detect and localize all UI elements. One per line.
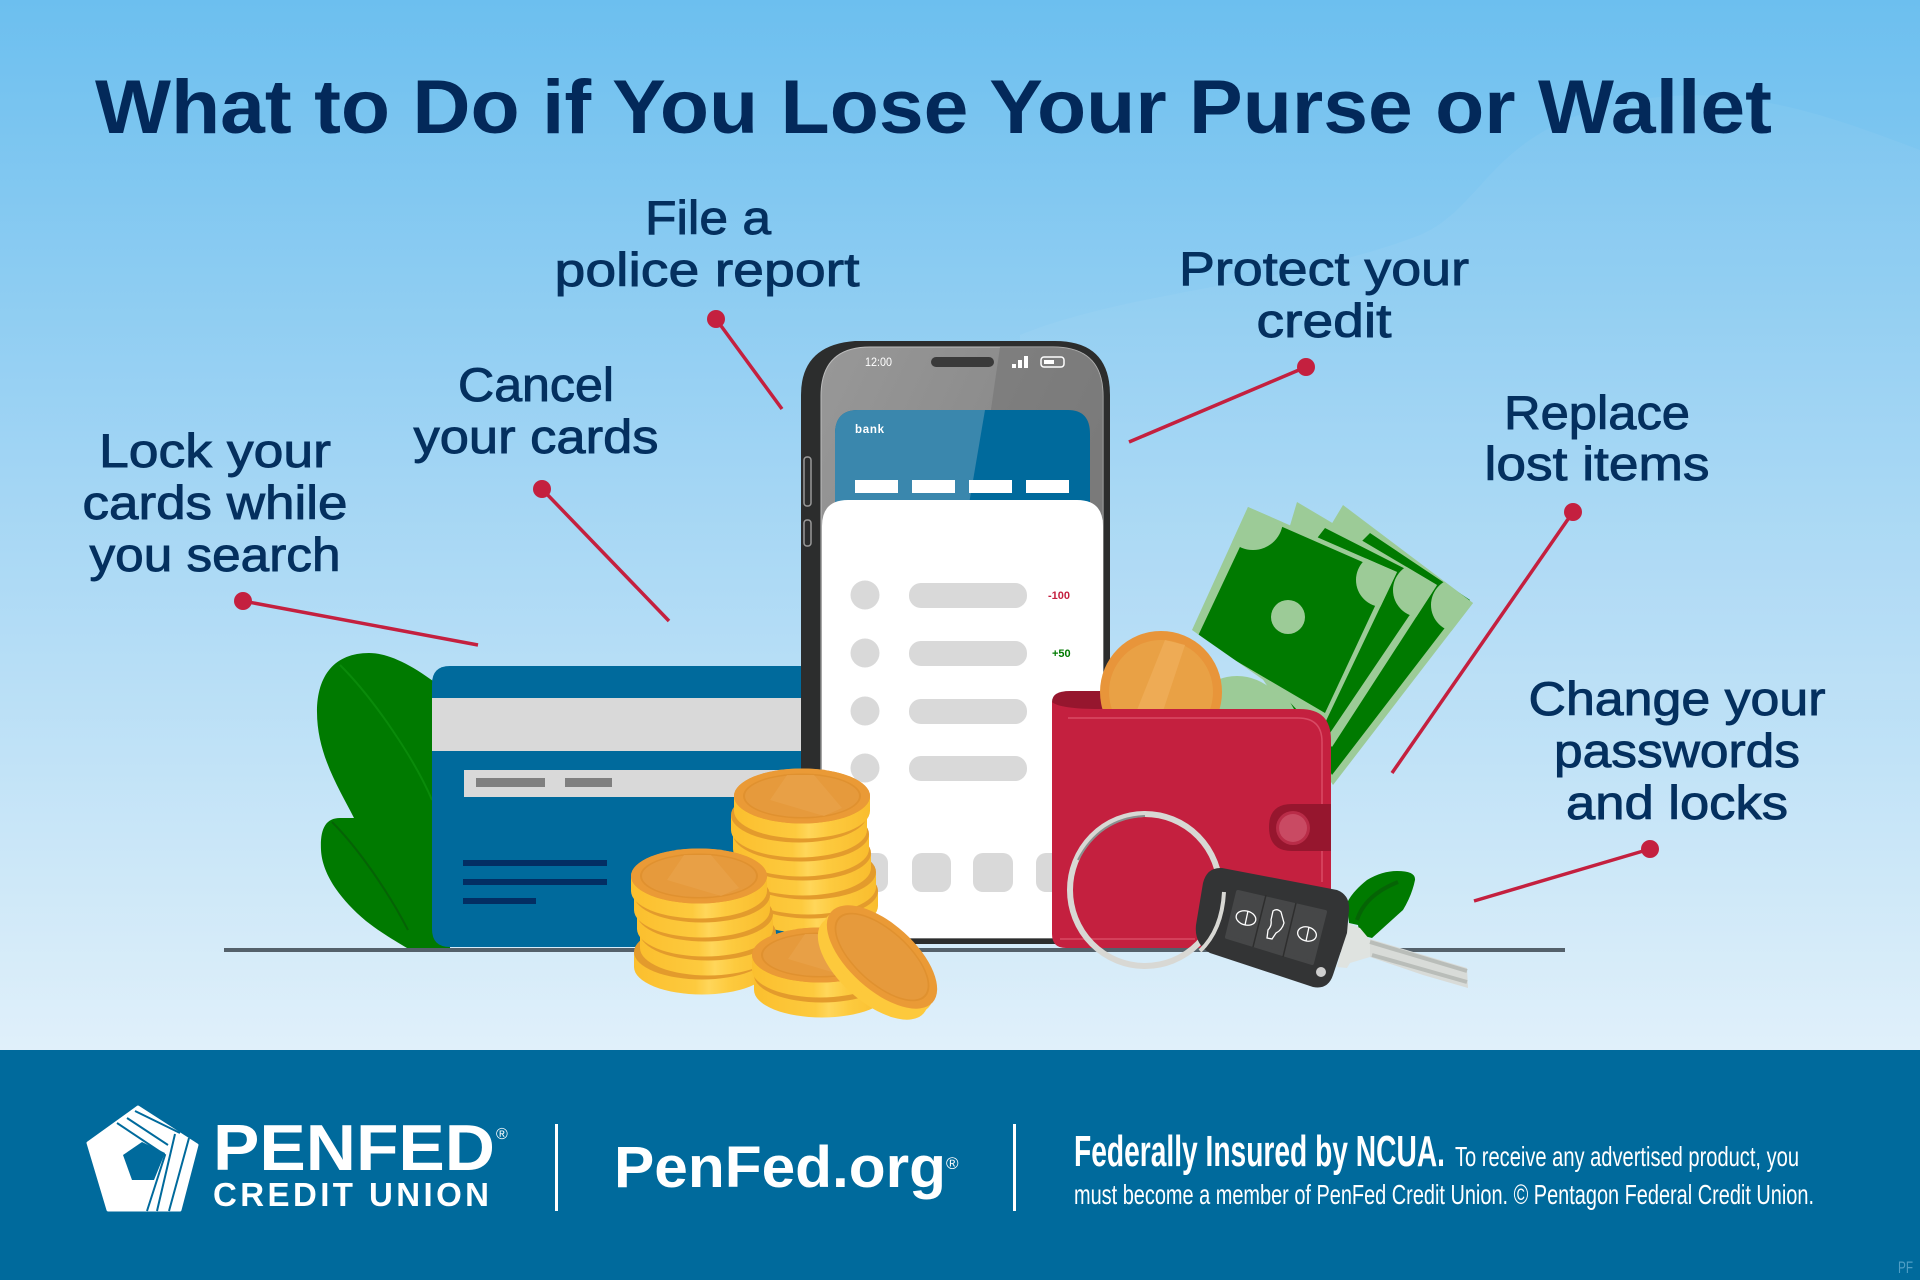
footer band	[0, 1050, 1920, 1280]
label: cancel your cards: your cards	[414, 410, 658, 463]
label: change passwords: passwords	[1554, 724, 1800, 777]
small leaf right	[1347, 871, 1415, 938]
website: ®	[946, 1154, 959, 1173]
logo wordmark: PENFED	[213, 1111, 495, 1184]
label: replace lost items	[1484, 386, 1710, 490]
key ring	[1070, 814, 1220, 966]
label: file a police report: File a	[645, 191, 772, 244]
pointer: protect credit	[1129, 358, 1315, 442]
cash bills	[1192, 502, 1473, 785]
label: file a police report	[554, 191, 860, 296]
label: lock your cards	[82, 424, 348, 581]
logo mark	[88, 1107, 197, 1211]
side buttons	[804, 457, 811, 546]
label: lock your cards: you search	[90, 528, 340, 581]
disclosure: Federally Insured by NCUA.	[1074, 1127, 1445, 1176]
coin in wallet	[1100, 631, 1222, 709]
transaction panel	[822, 500, 1103, 938]
label: protect your credit: credit	[1256, 294, 1392, 347]
front coins	[752, 887, 955, 1038]
label: protect your credit: Protect your	[1179, 242, 1469, 295]
left coin stack	[631, 848, 776, 994]
key blade	[1337, 923, 1468, 988]
disclosure	[1074, 1127, 1814, 1210]
label: protect your credit	[1179, 242, 1469, 347]
pointer: lock cards	[234, 592, 478, 645]
logo wordmark	[213, 1111, 508, 1213]
label: change passwords: Change your	[1528, 672, 1826, 725]
leaves left	[317, 653, 450, 948]
label: lock your cards: cards while	[82, 476, 348, 529]
pointer: replace items	[1392, 503, 1582, 773]
front bill	[1192, 507, 1397, 720]
status bar: 12:00	[865, 355, 892, 369]
bank card: bank	[855, 424, 885, 436]
pointer: cancel cards	[533, 480, 669, 621]
floor line	[224, 948, 1565, 952]
label: replace lost items: Replace	[1504, 386, 1690, 439]
label: cancel your cards: Cancel	[458, 358, 614, 411]
website: PenFed.org	[614, 1135, 946, 1200]
pointer: police report	[707, 310, 782, 409]
wallet clasp	[1269, 804, 1331, 851]
logo wordmark: ®	[496, 1126, 508, 1143]
title: What to Do if You Lose Your Purse or Wallet	[95, 65, 1772, 150]
status bar	[865, 355, 1064, 369]
back bill	[1263, 505, 1473, 785]
car key	[1070, 814, 1468, 988]
wallet	[1052, 631, 1331, 948]
transaction panel: +50	[1052, 648, 1071, 660]
label: cancel your cards	[414, 358, 658, 463]
credit card	[432, 666, 810, 947]
middle bill	[1286, 502, 1437, 747]
bank card	[835, 410, 1090, 510]
label: change passwords	[1528, 672, 1826, 829]
label: file a police report: police report	[554, 243, 860, 296]
pointer: change passwords	[1474, 840, 1659, 901]
label: lock your cards: Lock your	[99, 424, 331, 477]
logo wordmark: CREDIT UNION	[213, 1176, 489, 1213]
label: change passwords: and locks	[1566, 776, 1788, 829]
smartphone	[801, 341, 1110, 944]
label: replace lost items: lost items	[1484, 437, 1710, 490]
job code: PF	[1898, 1258, 1913, 1277]
transaction panel: -100	[1048, 590, 1070, 602]
key fob	[1196, 868, 1349, 988]
back coin stack	[731, 768, 878, 934]
